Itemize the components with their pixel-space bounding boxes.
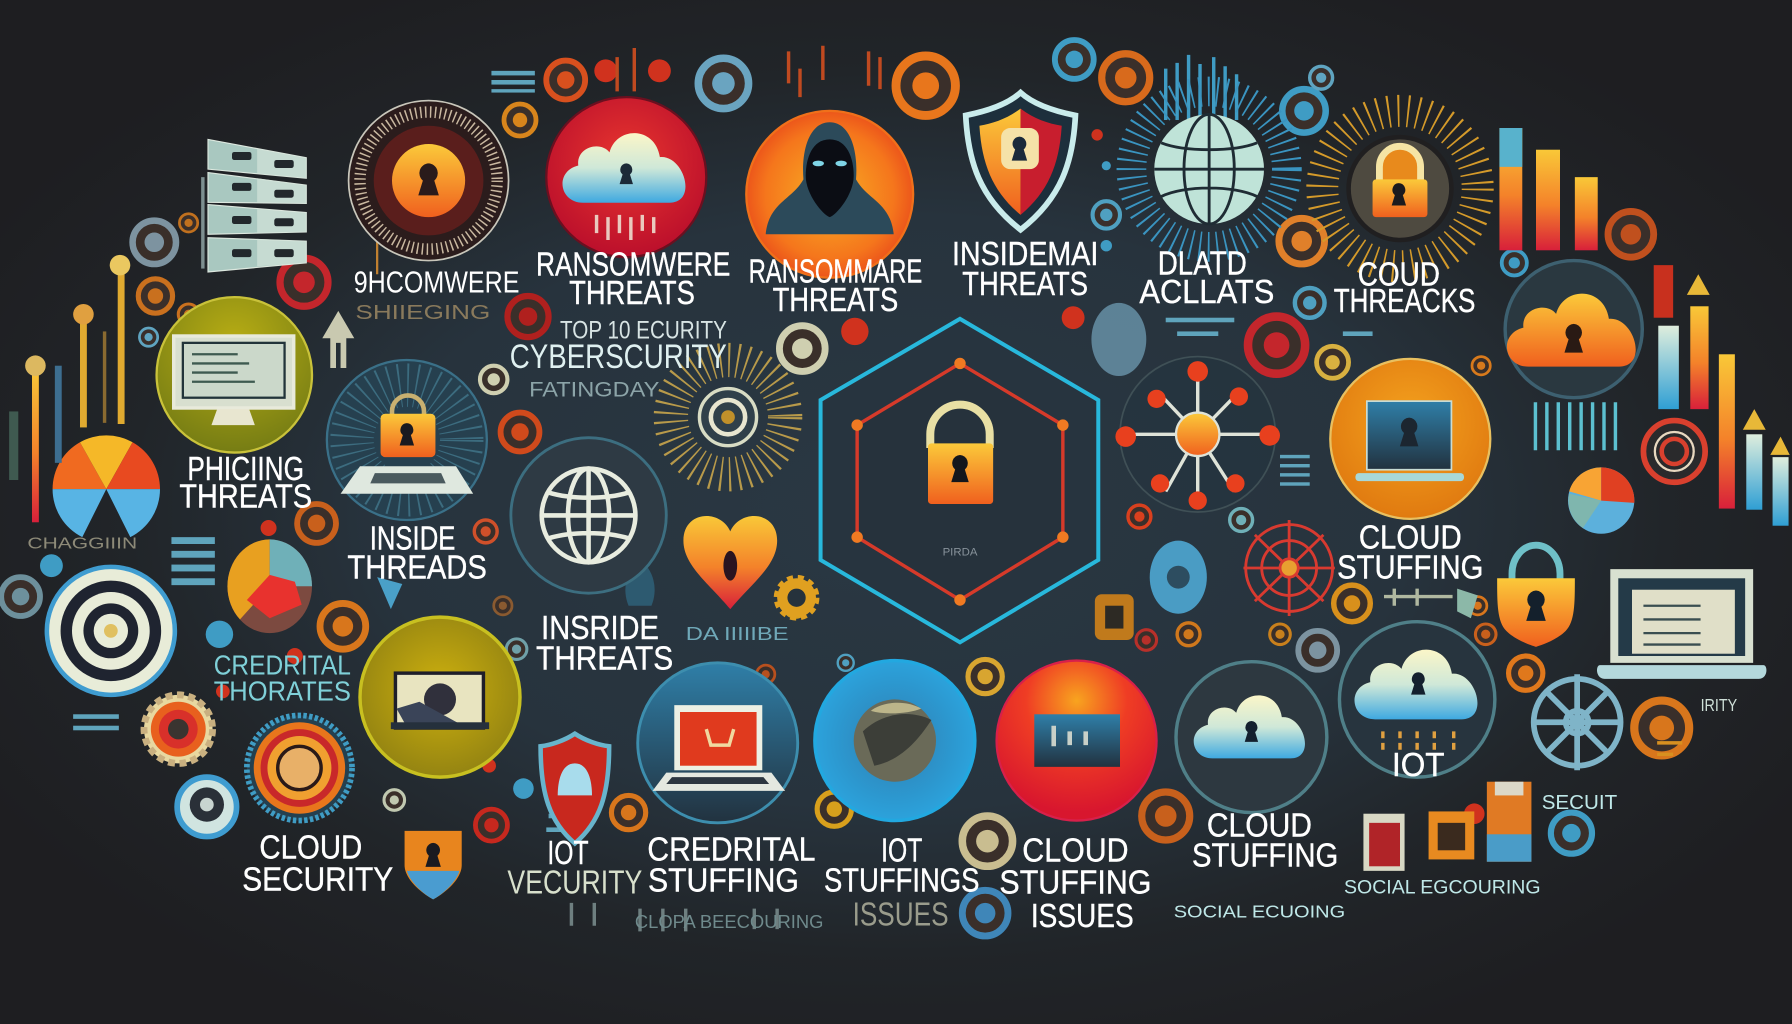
icon: gear [777, 578, 816, 617]
icon: keyhole ring [349, 101, 509, 261]
labels: middle row: THREATS [536, 641, 673, 678]
labels: middle row: THREADS [347, 549, 487, 586]
labels: top row: DLATD [1158, 245, 1247, 282]
labels: bottom row: IOT [547, 835, 589, 872]
labels: bottom row: CLOUD [1207, 808, 1312, 845]
icon: hooded hacker circle [746, 111, 913, 278]
labels: top row: SHIIEGING [355, 301, 490, 324]
labels: bottom row: SOCIAL ECUOING [1174, 902, 1345, 922]
icon: laptop on orange circle [1330, 359, 1490, 519]
labels: bottom row: STUFFING [999, 865, 1151, 902]
labels: bottom row: ISSUES [1031, 898, 1134, 935]
icon: shield with keyhole [966, 93, 1075, 230]
icon: pie chart right [1568, 467, 1634, 534]
icon: ship wheel [1534, 674, 1621, 770]
labels: bottom row: STUFFING [648, 862, 799, 899]
labels: middle row: INSIDE [370, 521, 455, 558]
icon: shield lower left [541, 734, 609, 843]
bar chart: top right [1499, 128, 1598, 250]
labels: top row: COUD [1358, 257, 1440, 294]
labels: bottom row: CLOUD [259, 829, 362, 866]
icon: target right [1643, 421, 1705, 482]
labels: middle row [27, 451, 1483, 707]
labels: bottom row: CLOPA BEECOURING [635, 911, 823, 932]
labels: top row: RANSOMWERE [536, 246, 730, 283]
heading: top 10 cybersecurity [510, 316, 727, 402]
labels: top row: THREACKS [1334, 283, 1475, 320]
padlock [928, 405, 993, 504]
labels: middle row: CLOUD [1359, 520, 1462, 557]
labels: middle row: THORATES [214, 676, 351, 707]
labels: top row: THREATS [962, 266, 1088, 303]
heading: top 10 cybersecurity: CYBERSCURITY [510, 338, 727, 376]
labels: middle row: THREATS [179, 478, 312, 515]
assorted arrow and teardrops [242, 206, 1478, 674]
icon: heart [683, 516, 777, 609]
labels: middle row: INSRIDE [541, 610, 659, 647]
labels: middle row: CREDRITAL [214, 649, 351, 680]
bar chart: far right [1534, 265, 1790, 526]
icon: orange cloud on dark circle [1505, 261, 1642, 398]
central hexagon: PIRDA [943, 546, 978, 558]
icon: rain cloud on dark circle [1339, 622, 1495, 777]
labels: top row [354, 236, 1475, 324]
icon: padlock with orange burst [1322, 111, 1478, 266]
labels: bottom row: CLOUD [1022, 833, 1129, 870]
blobs [1091, 303, 1207, 640]
labels: bottom row: VECURITY [507, 865, 642, 902]
labels: bottom row: IOT [1392, 747, 1445, 784]
icon: concentric orange ring [247, 715, 352, 821]
icon: cloud on dark circle [1176, 662, 1327, 813]
labels: top row: RANSOMMARE [749, 253, 922, 290]
labels: top row: ACLLATS [1139, 274, 1274, 311]
small vertical ticks [571, 46, 1682, 931]
icon: small shield with keyhole [405, 831, 462, 899]
central hexagon [821, 319, 1098, 642]
labels: bottom row: CREDRITAL [647, 832, 815, 869]
icon: globe circle [511, 438, 666, 593]
labels: top row: THREATS [773, 282, 898, 319]
lollipop bars left [9, 255, 130, 522]
labels: bottom row: SOCIAL EGCOURING [1344, 877, 1541, 899]
labels: middle row: STUFFING [1337, 549, 1483, 586]
labels: middle row: CHAGGIIIN [27, 536, 137, 553]
small stripe blocks [73, 71, 1373, 832]
icon: left pie chart [53, 435, 160, 537]
labels: top row: 9HCOMWERE [354, 265, 519, 300]
icon: sunburst target [671, 360, 785, 474]
icon: monitor on yellow circle [360, 617, 520, 777]
labels: top row: THREATS [569, 275, 695, 312]
icon: blue face ring [177, 777, 237, 837]
labels: top row: INSIDEMAI [952, 236, 1098, 273]
icon: device on red circle [997, 661, 1157, 821]
labels: bottom row: STUFFING [1192, 837, 1338, 874]
labels: bottom row: SECURITY [242, 861, 393, 898]
heading: top 10 cybersecurity: TOP 10 ECURITY [560, 316, 727, 344]
labels: bottom row: SECUIT [1542, 791, 1618, 814]
labels: bottom row: IOT [881, 833, 922, 870]
labels: middle row: DA IIIIIBE [686, 623, 789, 644]
icon: target rings [47, 567, 175, 695]
icon: globe with blue burst [1131, 91, 1287, 247]
icon: laptop on blue circle [638, 663, 798, 823]
icon: right laptop [1597, 569, 1766, 679]
icon: lower left pie [227, 539, 312, 633]
icon: large padlock [1497, 545, 1575, 647]
icon: spider web [1243, 520, 1335, 616]
icon: server racks [201, 139, 306, 272]
icon: network hub [1115, 357, 1280, 512]
icon: photo globe on blue circle [815, 661, 975, 821]
icon: sun gear [144, 695, 213, 763]
labels: middle row: PHICIING [187, 451, 304, 488]
heading: top 10 cybersecurity: FATINGDAY [529, 377, 659, 402]
icon: padlock and laptop circle [327, 360, 487, 520]
icon: cloud on red circle [546, 97, 706, 257]
icon: monitor on olive circle [157, 297, 312, 453]
labels: bottom row [242, 695, 1738, 935]
labels: bottom row: ISSUES [853, 897, 949, 934]
labels: bottom row: IRITY [1701, 695, 1738, 715]
icon: small pictures row [1363, 782, 1531, 871]
labels: bottom row: STUFFINGS [824, 862, 979, 899]
